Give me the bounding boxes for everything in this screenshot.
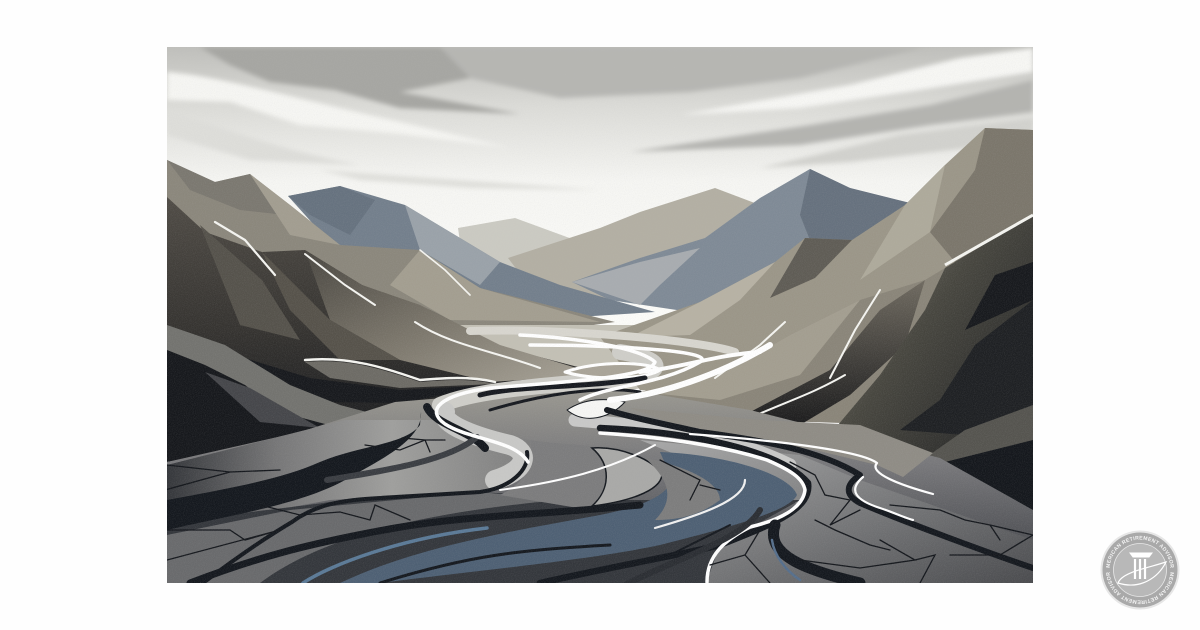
logo ring text bottom: AMERICAN RETIREMENT ADVISORS <box>1106 572 1174 604</box>
river channels <box>167 331 1033 600</box>
distant pale mountain <box>458 218 570 268</box>
left front dark mound <box>167 325 365 462</box>
right mid mountain <box>642 268 945 423</box>
film grain overlay <box>167 47 1033 583</box>
dark bottom left ground <box>167 492 800 583</box>
framed landscape picture <box>165 47 1033 600</box>
white river band top <box>610 345 770 400</box>
logo ring text top: AMERICAN RETIREMENT ADVISORS <box>1106 536 1174 568</box>
centre grey bar <box>500 470 606 508</box>
ridge highlights <box>215 222 880 420</box>
dark channel upper <box>427 407 485 448</box>
right back mountain <box>600 128 1033 400</box>
white river band left <box>436 335 655 462</box>
illustration canvas <box>167 47 1180 610</box>
bottom dark band <box>190 505 640 583</box>
right front mountain <box>827 215 1033 510</box>
dark tapered channel left <box>167 412 421 530</box>
left back dark ridge <box>167 197 578 412</box>
tan ridge left <box>167 160 615 325</box>
logo column icon <box>1118 553 1166 585</box>
white river band centre <box>530 345 805 582</box>
blue mountain right <box>572 169 918 312</box>
pale braided stream <box>470 331 735 352</box>
horizon plain <box>460 325 639 390</box>
blue mountain left <box>288 186 655 322</box>
lower right cracked ground <box>640 440 1033 583</box>
dark lens band <box>327 437 477 480</box>
speckled lens <box>592 448 662 506</box>
tan distant ridge <box>508 188 754 298</box>
tan lens <box>565 364 660 378</box>
valley ground <box>167 388 1033 540</box>
dark river rim centre <box>540 428 808 583</box>
right river edge <box>607 410 1033 568</box>
sky <box>167 47 1033 238</box>
blue stripe <box>303 528 487 583</box>
light speckled river bar <box>575 420 790 465</box>
ground cracks <box>165 438 1033 583</box>
blue channel zone <box>340 452 797 583</box>
bottom right channels <box>773 525 860 583</box>
speckled grey strip bottom left <box>167 492 560 583</box>
inner grey lens <box>645 458 720 520</box>
right shelf <box>712 422 933 477</box>
grey mid-left ground <box>167 420 512 512</box>
white lens <box>567 400 625 418</box>
long dark line <box>203 452 527 583</box>
